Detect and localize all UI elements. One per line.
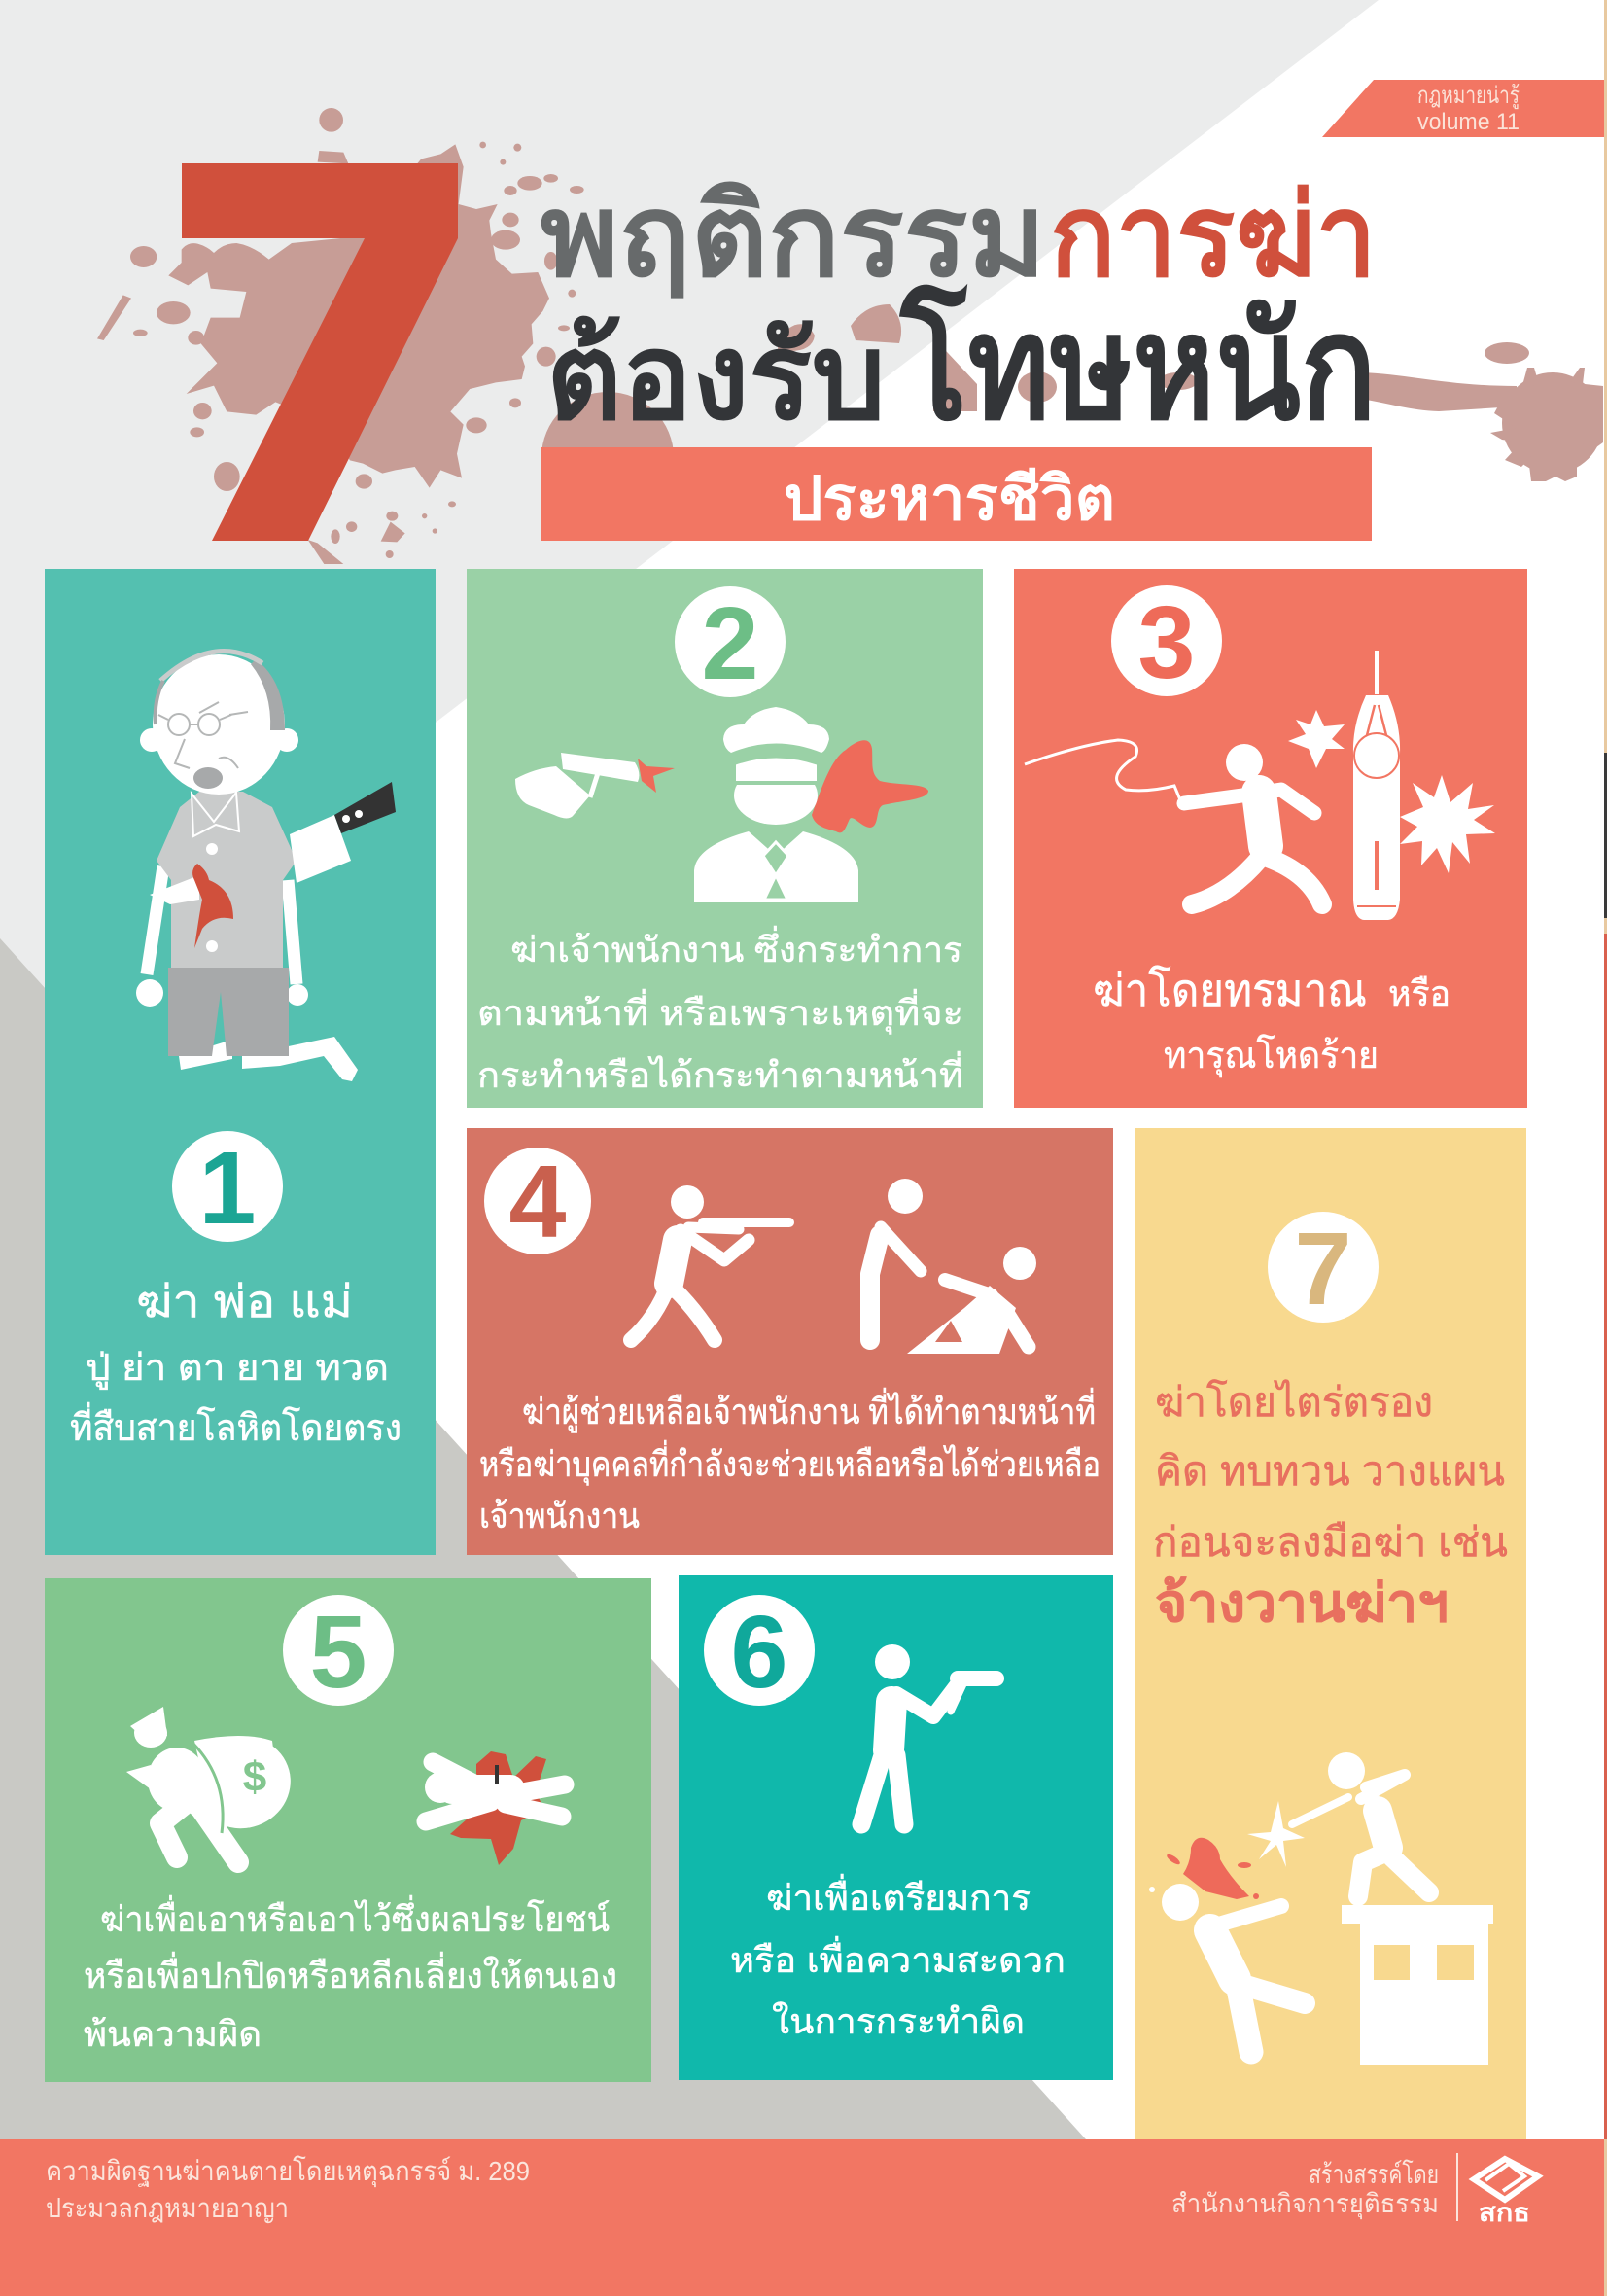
panel 5: for benefit: [45, 1578, 651, 2082]
icon: helper figures: [870, 1179, 1036, 1354]
number badge 1: [172, 1131, 283, 1246]
text 1: ปู่ ย่า ตา ยาย ทวด: [86, 1348, 389, 1390]
text 5: พ้นความผิด: [84, 2014, 262, 2054]
icon: robber with money bag: $: [243, 1753, 266, 1801]
number badge 7: [1268, 1212, 1379, 1326]
text 6: [730, 1874, 1066, 2041]
title: [541, 172, 1377, 449]
icon: stabbed victim: [425, 1751, 565, 1865]
text 1: [70, 1276, 402, 1449]
text 5: ฆ่าเพื่อเอาหรือเอาไว้ซึ่งผลประโยชน์: [100, 1895, 610, 1939]
big number 7: [182, 163, 458, 541]
text 6: ฆ่าเพื่อเตรียมการ: [766, 1874, 1031, 1918]
text 5: หรือเพื่อปกปิดหรือหลีกเลี่ยงให้ตนเอง: [84, 1952, 617, 1996]
text 2: ฆ่าเจ้าพนักงาน ซึ่งกระทำการ: [510, 926, 962, 970]
number badge 5: [283, 1595, 394, 1710]
text 2: [477, 926, 963, 1095]
text 4: หรือฆ่าบุคคลที่กำลังจะช่วยเหลือหรือได้ช่วยเหลือ: [479, 1440, 1100, 1486]
text 7: คิด ทบทวน วางแผน: [1155, 1448, 1505, 1494]
text 7: ฆ่าโดยไตร่ตรอง: [1155, 1378, 1433, 1425]
footer credit: สำนักงานกิจการยุติธรรม: [1171, 2189, 1439, 2220]
text 4: เจ้าพนักงาน: [479, 1496, 640, 1536]
footer legal reference: ความผิดฐานฆ่าคนตายโดยเหตุฉกรรจ์ ม. 289: [46, 2155, 530, 2188]
icon: gun firing: [515, 753, 675, 819]
icon: rifleman: [631, 1185, 789, 1340]
title: โทษหนัก: [898, 283, 1377, 449]
text 1: ฆ่า พ่อ แม่: [136, 1276, 353, 1326]
text 7: ก่อนจะลงมือฆ่า เช่น: [1153, 1519, 1508, 1565]
icon: falling victim: [1149, 1838, 1305, 2052]
text 3: หรือ: [1388, 973, 1450, 1013]
text 4: [479, 1388, 1100, 1536]
icon: whipping figure: [1025, 740, 1322, 904]
panel 3: torture: [1014, 569, 1527, 1108]
text 3: ทารุณโหดร้าย: [1164, 1034, 1379, 1077]
footer credit: สร้างสรรค์โดย: [1309, 2159, 1439, 2189]
footer band: [0, 2139, 1604, 2296]
icon: hanging victim and stars: [1288, 651, 1495, 920]
icon: old man stabbed: [136, 652, 396, 1081]
text 7: จ้างวานฆ่าฯ: [1155, 1574, 1449, 1633]
panel 4: helpers of officer: [467, 1128, 1113, 1555]
title: การฆ่า: [1050, 172, 1377, 300]
banner: ประหารชีวิต: [541, 447, 1372, 541]
number badge 2: 2: [702, 586, 758, 701]
right blood splash with trail: [1361, 342, 1603, 481]
text 2: กระทำหรือได้กระทำตามหน้าที่: [477, 1051, 963, 1095]
volume tag: กฎหมายน่ารู้: [1417, 83, 1520, 110]
icon: shot officer: [694, 707, 928, 902]
text 6: หรือ เพื่อความสะดวก: [730, 1936, 1066, 1980]
text 3: [1093, 965, 1450, 1077]
panel 7: premeditated: [1135, 1128, 1526, 2139]
volume tag: [1322, 80, 1604, 137]
text 2: ตามหน้าที่ หรือเพราะเหตุที่จะ: [477, 989, 963, 1035]
volume tag: volume 11: [1417, 109, 1520, 135]
number badge 7: 7: [1295, 1212, 1351, 1326]
panel 6: for convenience: [679, 1575, 1113, 2080]
title: พฤติกรรม: [541, 172, 1046, 300]
text 6: ในการกระทำผิด: [772, 2001, 1025, 2041]
text 7: [1153, 1378, 1508, 1633]
text 4: ฆ่าผู้ช่วยเหลือเจ้าพนักงาน ที่ได้ทำตามหน้าที่: [522, 1388, 1096, 1433]
number badge 4: [484, 1145, 591, 1259]
footer legal reference: ประมวลกฎหมายอาญา: [46, 2193, 289, 2223]
logo: [1474, 2159, 1538, 2227]
panel 1: parents: [45, 569, 436, 1555]
footer credit: [1171, 2159, 1439, 2220]
number badge 1: 1: [199, 1131, 256, 1246]
text 1: ที่สืบสายโลหิตโดยตรง: [70, 1402, 402, 1449]
icon: shooter: [861, 1644, 996, 1824]
number badge 5: 5: [310, 1595, 367, 1710]
number badge 2: [675, 586, 786, 701]
icon: robber with money bag: [126, 1707, 300, 1862]
number badge 4: 4: [509, 1145, 567, 1259]
icon: building with attacker: [1247, 1752, 1493, 2065]
banner: ประหารชีวิต: ประหารชีวิต: [784, 466, 1115, 533]
number badge 3: 3: [1138, 585, 1195, 700]
blood splatter behind the big 7: [97, 108, 1603, 564]
logo: สกธ: [1479, 2198, 1530, 2227]
title: ต้องรับ: [546, 310, 886, 444]
text 5: [84, 1895, 617, 2054]
panel 2: officer: [467, 569, 983, 1108]
number badge 6: [704, 1595, 815, 1710]
footer legal reference: [46, 2155, 530, 2223]
number badge 6: 6: [731, 1595, 787, 1710]
text 3: ฆ่าโดยทรมาณ: [1093, 965, 1367, 1015]
number badge 3: [1111, 585, 1222, 700]
